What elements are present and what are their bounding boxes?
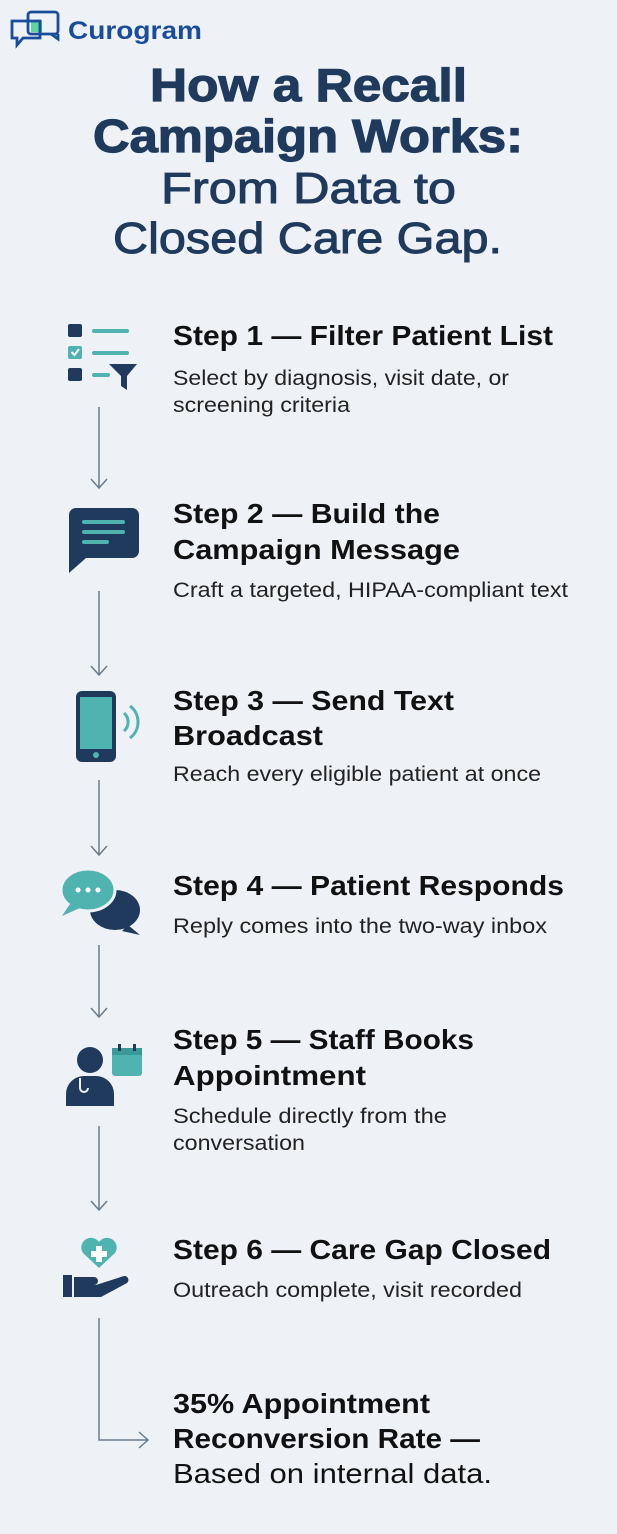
title [93, 59, 523, 263]
title: How a Recall [150, 59, 467, 111]
step 5: Schedule directly from the [173, 1105, 447, 1128]
arrows connecting steps [91, 407, 148, 1448]
step 4 text: Step 4 — Patient Responds [173, 870, 564, 901]
title: Campaign Works: [93, 110, 523, 162]
step 1: screening criteria [173, 394, 350, 417]
step 6 text: Step 6 — Care Gap Closed [173, 1234, 551, 1265]
step 2 text: Step 2 — Build the [173, 498, 440, 529]
step 4: Reply comes into the two-way inbox [173, 915, 548, 938]
step 2: Campaign Message [173, 534, 460, 565]
title: Closed Care Gap. [113, 214, 502, 263]
step 5: conversation [173, 1132, 305, 1155]
icon: heart in hand [63, 1238, 128, 1297]
step 2: Craft a targeted, HIPAA-compliant text [173, 579, 568, 602]
step 5 [66, 1024, 474, 1155]
step 6 [63, 1234, 551, 1302]
icon: filter list [68, 324, 137, 390]
step 5 text: Step 5 — Staff Books [173, 1024, 474, 1055]
step 3: Reach every eligible patient at once [173, 763, 541, 786]
icon: phone broadcast [76, 691, 138, 762]
icon: message bubble [69, 508, 139, 573]
step 3: Broadcast [173, 720, 323, 751]
icon: logo chat bubbles [12, 12, 58, 45]
result stat: 35% Appointment [173, 1388, 430, 1419]
step 1 text: Step 1 — Filter Patient List [173, 320, 553, 351]
step 6: Outreach complete, visit recorded [173, 1279, 522, 1302]
result stat: Reconversion Rate — [173, 1423, 480, 1454]
step 4 [61, 869, 564, 938]
step 1: Select by diagnosis, visit date, or [173, 367, 509, 390]
icon: doctor with calendar [66, 1044, 142, 1106]
step 5: Appointment [173, 1060, 366, 1091]
logo [12, 12, 202, 45]
step 2 [69, 498, 568, 602]
title: From Data to [161, 164, 456, 213]
icon: chat bubbles [61, 869, 140, 935]
logo text: Curogram [68, 17, 202, 45]
step 3 [76, 685, 541, 786]
result stat [173, 1388, 492, 1489]
step 3 text: Step 3 — Send Text [173, 685, 454, 716]
step 1 [68, 320, 553, 417]
result stat: Based on internal data. [173, 1458, 492, 1489]
